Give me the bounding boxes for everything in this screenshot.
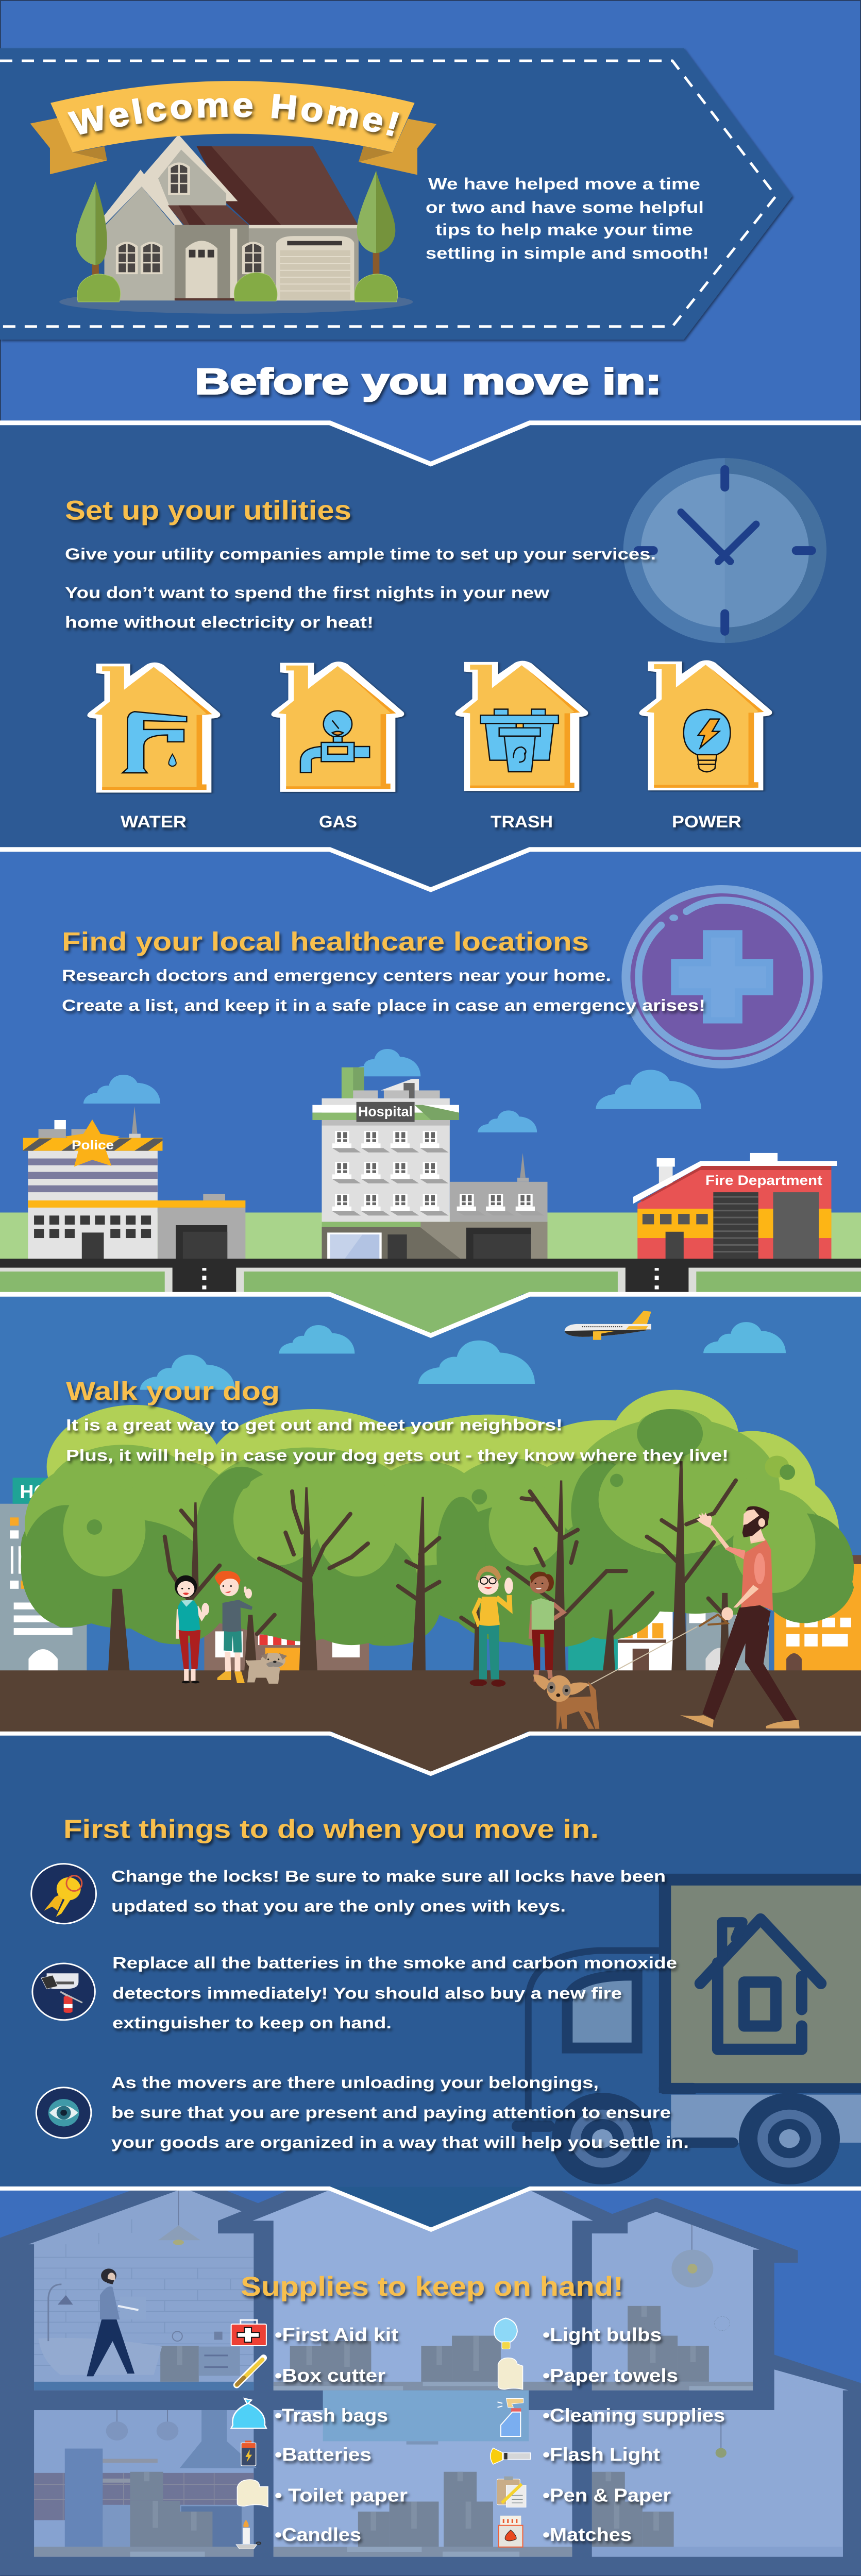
list: supplies right column — [543, 2325, 725, 2545]
label: POWER: POWER — [672, 813, 741, 832]
skylight opening — [323, 2391, 529, 2445]
label: TRASH: TRASH — [491, 813, 553, 832]
right lower room — [592, 2369, 849, 2557]
panel: walk your dog — [0, 1291, 861, 1734]
text: utilities advice: Give your utility companies ample time to set up your services. — [65, 545, 656, 563]
man carrying box — [87, 2268, 146, 2376]
text: pay attention to movers: your goods are organized in a way that will help you settle in. — [111, 2134, 689, 2152]
icon: battery — [241, 2441, 256, 2466]
chihuahua dog — [533, 1674, 599, 1729]
icon: trash house — [455, 661, 588, 791]
list: supplies left column: •Box cutter — [275, 2365, 385, 2386]
list: supplies right column: •Pen & Paper — [543, 2485, 671, 2506]
icon: toilet paper — [237, 2480, 268, 2506]
text: change the locks: Change the locks! Be sure to make sure all locks have been — [111, 1868, 666, 1886]
list: supplies left column: •Batteries — [275, 2444, 372, 2465]
text: walk your dog advice: Plus, it will help in case your dog gets out - they know where they live! — [66, 1447, 729, 1465]
list: supplies left column — [275, 2325, 408, 2545]
supply icons — [231, 2318, 530, 2549]
ribbon — [30, 81, 436, 175]
text: replace batteries: detectors immediately! You should also buy a new fire — [112, 1985, 622, 2003]
label: GAS: GAS — [319, 813, 357, 832]
list: supplies right column: •Cleaning supplies — [543, 2405, 725, 2426]
center upper room — [252, 2190, 593, 2391]
people left — [175, 1571, 287, 1684]
house cross-section illustration — [0, 2187, 861, 2575]
house windows and doors — [116, 162, 354, 300]
ground — [0, 1670, 861, 1732]
icon: clock — [623, 458, 826, 643]
boy with thumbs up — [215, 1571, 252, 1683]
list: supplies left column: • Toilet paper — [275, 2485, 408, 2506]
hotel sign: HOTEL — [20, 1481, 85, 1502]
pug dog — [246, 1653, 287, 1684]
section background: intro — [0, 0, 861, 423]
icon: flash light — [491, 2448, 530, 2464]
heading: healthcare: Find your local healthcare locations — [62, 927, 589, 956]
label: Hospital: Hospital — [358, 1104, 413, 1120]
icon: medical cross — [621, 885, 822, 1069]
icon: matches — [499, 2516, 523, 2547]
house structure — [0, 2190, 861, 2575]
heading: supplies: Supplies to keep on hand! — [241, 2272, 623, 2302]
leash — [587, 1626, 697, 1686]
man with glasses — [470, 1566, 513, 1687]
icon: candle — [236, 2520, 261, 2549]
heading: Before you move in: Before you move in: — [195, 361, 662, 402]
intro text — [426, 175, 709, 263]
panel: supplies background — [0, 2188, 861, 2575]
building: hospital — [312, 1067, 548, 1259]
list: supplies right column: •Light bulbs — [543, 2325, 662, 2346]
text: change the locks — [111, 1868, 666, 1916]
woman with hand on hip — [530, 1571, 563, 1682]
heading: walk your dog: Walk your dog — [66, 1377, 280, 1406]
intro text: We have helped move a time — [428, 175, 700, 193]
text: change the locks: updated so that you are the only ones with keys. — [111, 1897, 566, 1916]
moving truck illustration — [517, 1874, 861, 2144]
text: replace batteries: extinguisher to keep on hand. — [112, 2014, 392, 2032]
text: healthcare advice: Create a list, and keep it in a safe place in case an emergency arises! — [62, 996, 705, 1015]
kitchen room — [34, 2410, 257, 2557]
icon: keys — [31, 1864, 96, 1924]
text: replace batteries — [112, 1954, 677, 2032]
truck cargo — [659, 1874, 861, 2143]
text: utilities advice — [65, 545, 656, 632]
list: supplies left column: •Trash bags — [275, 2405, 388, 2426]
icon: pen and paper — [497, 2477, 526, 2507]
text: utilities advice: home without electricity or heat! — [65, 614, 374, 632]
panel: healthcare locations — [0, 847, 861, 1293]
box tape — [144, 2306, 696, 2531]
heading: first things: First things to do when you move in. — [63, 1815, 599, 1844]
icon: light bulb — [494, 2318, 517, 2349]
brick room — [28, 2190, 254, 2391]
list: supplies left column: •Candles — [275, 2524, 361, 2545]
label: WATER: WATER — [121, 813, 187, 832]
house icon on truck — [700, 1919, 821, 2049]
people middle — [470, 1566, 697, 1729]
text: pay attention to movers: be sure that you are present and paying attention to ensure — [111, 2104, 671, 2122]
item: pay attention to movers — [36, 2074, 689, 2152]
text: healthcare advice — [62, 967, 705, 1015]
icon: first aid kit — [231, 2320, 266, 2346]
clouds — [83, 1049, 701, 1132]
icon: box cutter — [237, 2358, 264, 2385]
bushes — [77, 273, 398, 302]
list: supplies left column: •First Aid kit — [275, 2325, 398, 2346]
text: pay attention to movers — [111, 2074, 689, 2152]
tree trunks — [108, 1461, 736, 1671]
icon: paper towels — [498, 2358, 523, 2389]
label: Police: Police — [72, 1138, 114, 1153]
center lower room — [274, 2410, 572, 2557]
building: police — [23, 1106, 245, 1259]
banner: welcome panel — [0, 48, 792, 340]
icon: water house — [87, 663, 220, 792]
icon: gas house — [271, 662, 404, 792]
trees — [76, 171, 395, 276]
label: Fire Department: Fire Department — [705, 1173, 822, 1188]
truck cab — [517, 1951, 733, 2144]
intro text: tips to help make your time — [435, 221, 693, 239]
park scene — [0, 1311, 861, 1671]
text: healthcare advice: Research doctors and emergency centers near your home. — [62, 967, 611, 985]
list: supplies right column: •Matches — [543, 2524, 632, 2545]
background buildings — [0, 1478, 861, 1671]
text: utilities advice: You don’t want to spend the first nights in your new — [65, 584, 550, 602]
title: Welcome Home: Welcome Home! — [67, 94, 402, 140]
list: supplies right column: •Paper towels — [543, 2365, 678, 2386]
clouds — [140, 1322, 786, 1390]
intro text: settling in simple and smooth! — [426, 245, 709, 263]
heading: set up your utilities: Set up your utilities — [65, 495, 351, 526]
panel: set up your utilities — [0, 421, 861, 850]
house roof — [97, 134, 358, 228]
utility icons row — [87, 660, 772, 792]
woman waving — [175, 1575, 209, 1683]
illustration: house and trees — [30, 81, 436, 314]
icon: smoke detector and extinguisher — [32, 1963, 95, 2020]
ground and road — [0, 1213, 861, 1304]
text: pay attention to movers: As the movers are there unloading your belongings, — [111, 2074, 599, 2092]
right upper room — [592, 2212, 759, 2391]
icon: spray bottle — [498, 2398, 524, 2436]
bathtub and sink — [39, 2284, 240, 2376]
airplane — [565, 1311, 651, 1340]
tree canopy — [21, 1390, 854, 1648]
text: walk your dog advice — [66, 1416, 729, 1465]
text: replace batteries: Replace all the batteries in the smoke and carbon monoxide — [112, 1954, 677, 1972]
house walls — [104, 225, 359, 300]
icon: power house — [639, 660, 772, 790]
city scene — [0, 885, 861, 1304]
building: fire department — [633, 1153, 837, 1259]
item: change the locks — [31, 1864, 666, 1924]
icon: eye — [36, 2088, 91, 2138]
panel: first things to do — [0, 1731, 861, 2189]
man walking dog — [680, 1506, 800, 1728]
list: supplies right column: •Flash Light — [543, 2444, 660, 2465]
lamps — [158, 2190, 730, 2331]
intro text: or two and have some helpful — [426, 199, 704, 217]
text: walk your dog advice: It is a great way to get out and meet your neighbors! — [66, 1416, 563, 1434]
moving boxes — [130, 2306, 709, 2547]
truck wheels — [552, 2093, 840, 2184]
chevron fill — [329, 2187, 530, 2230]
item: replace batteries — [32, 1954, 677, 2032]
icon: trash bag — [231, 2398, 266, 2428]
